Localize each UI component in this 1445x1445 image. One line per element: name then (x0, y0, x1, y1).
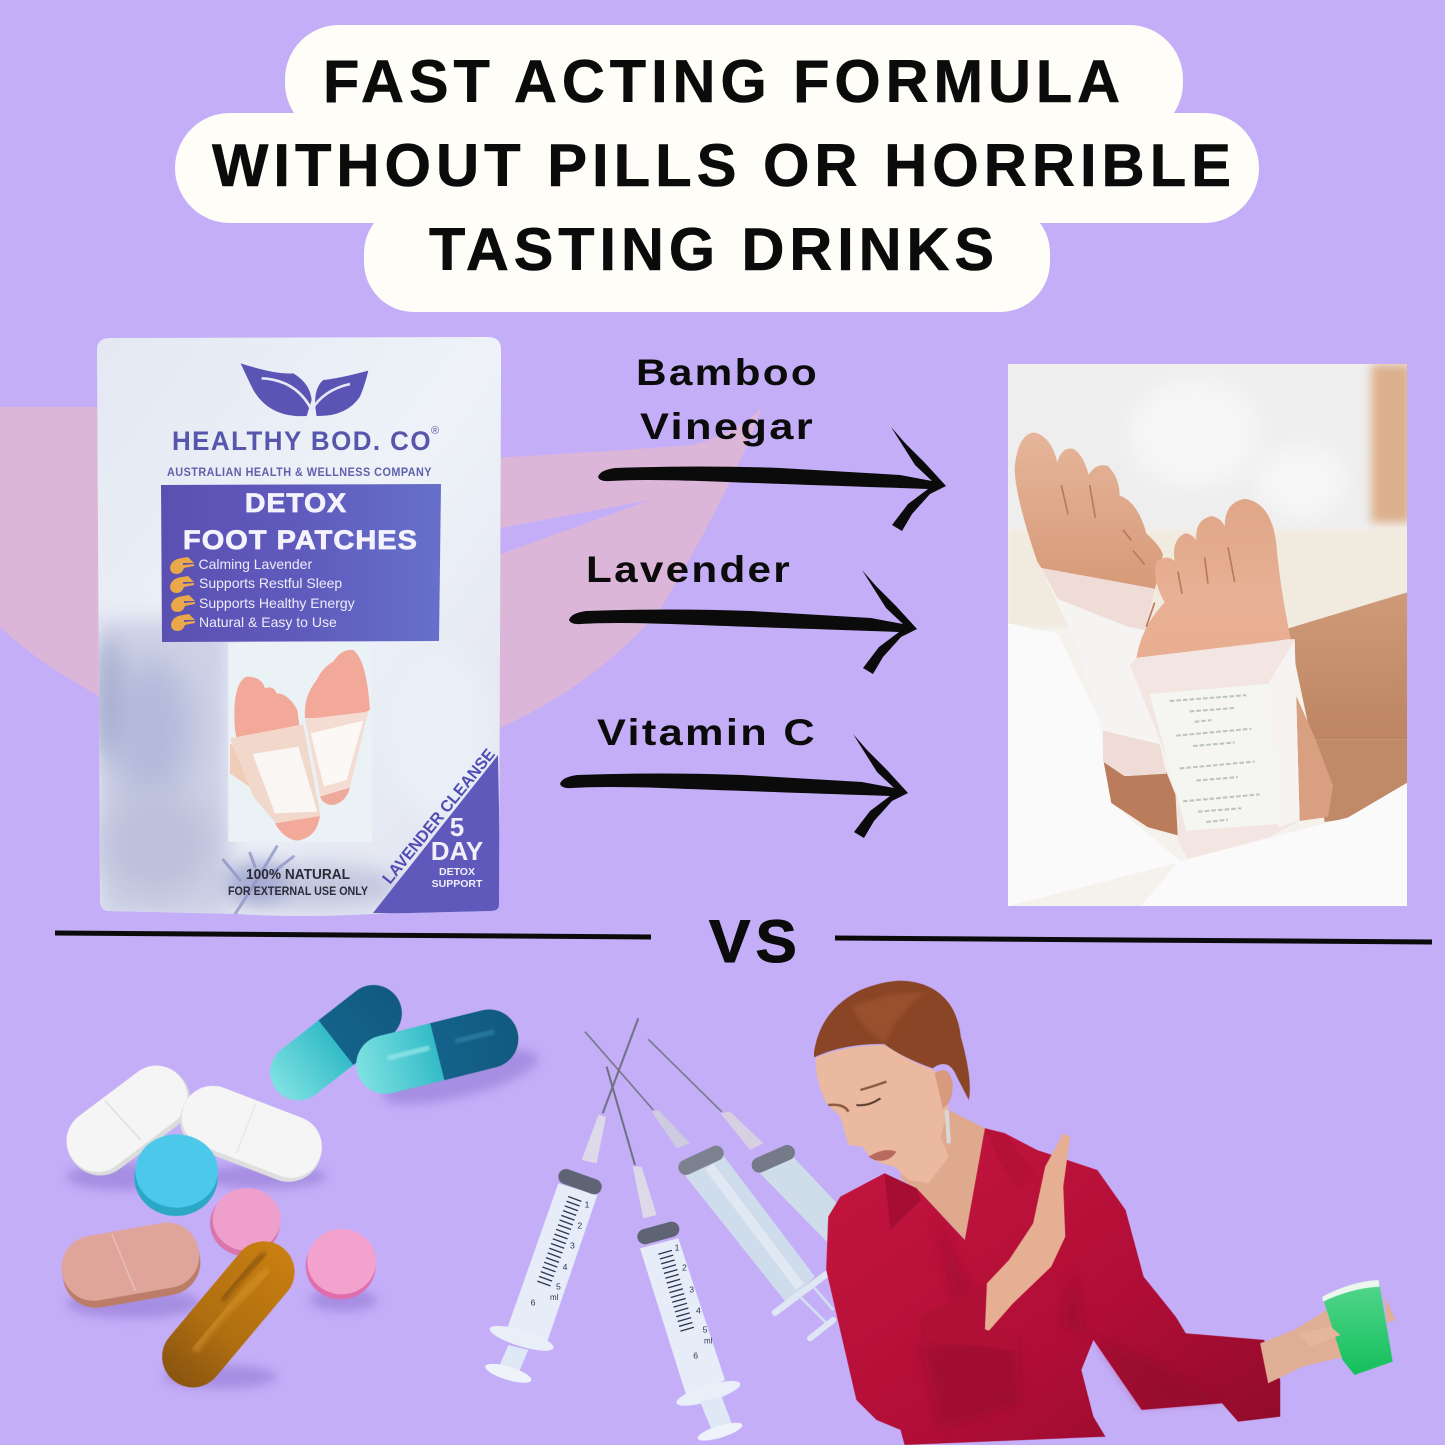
pink round pill small (210, 1191, 280, 1256)
pink round pill right (306, 1233, 376, 1299)
syringe left: 3 (570, 1241, 575, 1251)
brand name: HEALTHY BOD. CO (172, 426, 432, 456)
company tagline: AUSTRALIAN HEALTH & WELLNESS COMPANY (167, 467, 432, 479)
green drink (1322, 1280, 1393, 1375)
benefit list: Natural & Easy to Use (199, 614, 337, 630)
pouch feet photo (228, 643, 372, 842)
pointing hand icons (170, 557, 195, 631)
benefit list: Calming Lavender (198, 556, 312, 572)
syringe front ml: ml (704, 1336, 713, 1345)
lavender sprig (223, 847, 293, 917)
sheet right (1141, 782, 1408, 906)
hair (814, 981, 970, 1100)
speckled oval tablet (56, 1217, 206, 1313)
syringe left: 1 (585, 1199, 590, 1209)
shirt shading (921, 1210, 1222, 1430)
divider left (55, 933, 651, 937)
hand holding drink (1260, 1310, 1345, 1383)
cuff (921, 1283, 1019, 1352)
benefit list: Supports Healthy Energy (199, 595, 355, 611)
photo: feet with patches (1008, 364, 1411, 906)
product title: DETOX (245, 488, 347, 518)
leg (1288, 592, 1408, 739)
teal capsule 2 (350, 1003, 525, 1100)
raised hand (985, 1133, 1070, 1331)
five day label: SUPPORT (432, 878, 483, 890)
face (816, 1045, 949, 1183)
registered mark: ® (431, 425, 439, 437)
right patch (1130, 639, 1300, 859)
decorative pink leaf behind pouch (0, 407, 762, 732)
purple product panel (161, 484, 441, 642)
syringe front: 6 (693, 1351, 698, 1361)
benefit list: Supports Restful Sleep (199, 575, 342, 591)
syringe front: 1 (675, 1243, 680, 1253)
syringe left (483, 1018, 638, 1387)
pills group (54, 974, 542, 1400)
five day label: DAY (431, 836, 483, 866)
benefit list (198, 556, 355, 630)
neck and chest (901, 1070, 1001, 1243)
arrow 3 (560, 734, 908, 838)
arrow 1 (598, 427, 946, 531)
sheet left (1008, 623, 1181, 906)
syringe left: 5 (556, 1281, 561, 1291)
syringe left: 6 (531, 1297, 536, 1307)
syringe front: 5 (703, 1325, 708, 1335)
product pouch (97, 337, 501, 920)
title line 3: TASTING DRINKS (429, 216, 999, 283)
right foot (1136, 499, 1291, 661)
syringe front: 4 (696, 1305, 701, 1315)
left foot (1015, 432, 1163, 590)
syringe left: 4 (563, 1262, 568, 1272)
five day label: DETOX (439, 866, 475, 878)
ingredient: lavender: Lavender (586, 549, 792, 590)
syringes (483, 1018, 840, 1444)
syringe far right (648, 1039, 840, 1245)
syringe back middle (585, 1032, 833, 1338)
ankle (1295, 692, 1333, 821)
white tablet 2 (171, 1077, 331, 1191)
five day label (431, 812, 483, 890)
title banner (175, 25, 1259, 312)
ingredient: bamboo vinegar: Vinegar (640, 406, 815, 447)
left patch (1041, 568, 1166, 776)
shirt (826, 1128, 1280, 1445)
thumb (1298, 1327, 1341, 1347)
syringe left ml: ml (550, 1293, 559, 1302)
divider right (835, 938, 1432, 942)
syringe front: 2 (682, 1263, 687, 1273)
teal capsule 1 (259, 974, 413, 1112)
left heel (1104, 762, 1178, 836)
vs label: VS (709, 908, 802, 975)
title line 2: WITHOUT PILLS OR HORRIBLE (212, 132, 1236, 199)
pill shadows (67, 1038, 542, 1388)
collar (884, 1173, 921, 1230)
external use note: FOR EXTERNAL USE ONLY (228, 884, 368, 898)
patch printing (1170, 695, 1260, 822)
syringe front: 3 (689, 1285, 694, 1295)
syringe left: 2 (577, 1220, 582, 1230)
lavender cleanse corner label: LAVENDER CLEANSE (379, 746, 499, 888)
five day label: 5 (450, 812, 464, 842)
ingredient: bamboo vinegar: Bamboo (636, 352, 819, 393)
ingredient: vitamin c: Vitamin C (597, 712, 817, 753)
woman refusing drink (814, 981, 1396, 1445)
amber softgel (150, 1229, 307, 1400)
natural claim: 100% NATURAL (246, 867, 350, 883)
product pouch: FOOT PATCHES (183, 525, 418, 555)
syringe front (607, 1067, 744, 1444)
title line 1: FAST ACTING FORMULA (323, 48, 1125, 115)
pouch leaf logo (241, 363, 368, 416)
ingredient: bamboo vinegar (636, 352, 819, 447)
blue round pill (134, 1139, 218, 1216)
white tablet 1 (54, 1053, 203, 1188)
arrow 2 (569, 570, 917, 674)
